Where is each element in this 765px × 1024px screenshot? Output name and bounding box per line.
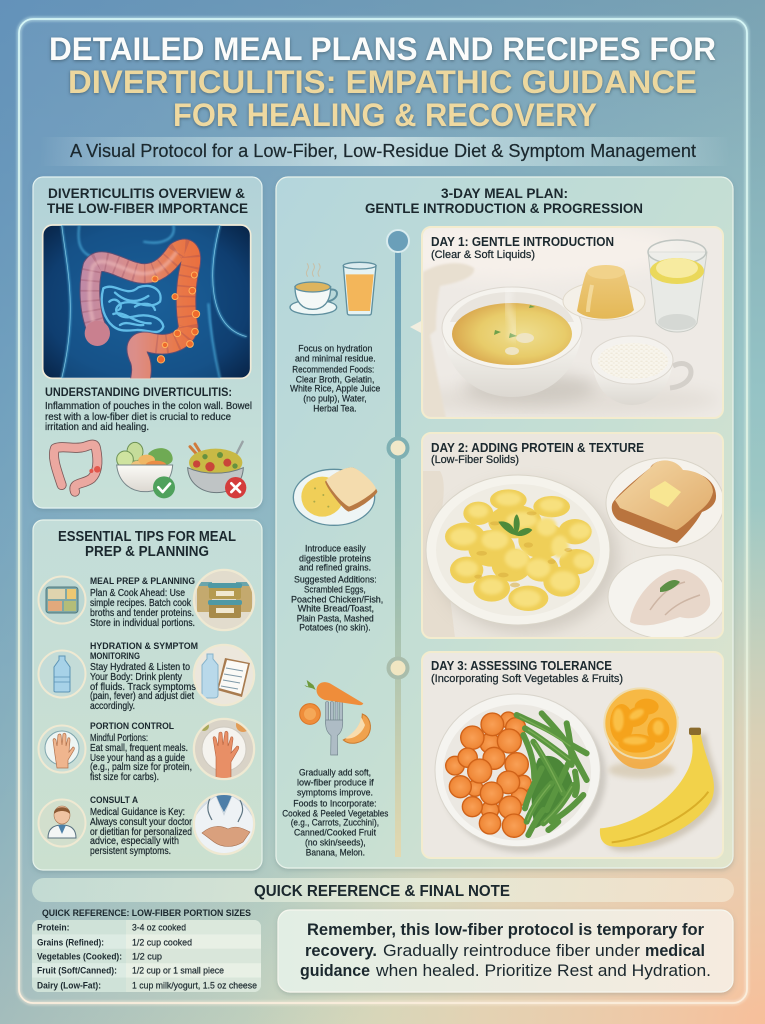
- tips heading: PREP & PLANNING: [85, 544, 209, 560]
- portion size table: [32, 908, 261, 992]
- hydration text: HYDRATION & SYMPTOM: [90, 641, 198, 652]
- anatomy illustration: colon: [43, 225, 251, 383]
- day 2 description: Introduce easily: [305, 544, 366, 554]
- final note: Remember, this low-fiber protocol is temporary for: [307, 920, 704, 939]
- title: FOR HEALING & RECOVERY: [173, 97, 597, 133]
- understanding diverticulitis text: Inflammation of pouches in the colon wall. Bowel: [45, 401, 252, 412]
- meal prep text: [90, 576, 195, 629]
- day 2 description: Poached Chicken/Fish,: [291, 594, 383, 606]
- day 1 description: and minimal residue.: [295, 354, 376, 364]
- title: [49, 31, 716, 133]
- title: DIVERTICULITIS: EMPATHIC GUIDANCE: [68, 64, 697, 100]
- portion control text: Use your hand as a guide: [90, 753, 185, 764]
- tip: portion control: [38, 718, 254, 783]
- day 1 description: [290, 344, 380, 414]
- subtitle: A Visual Protocol for a Low-Fiber, Low-Residue Diet & Symptom Management: [70, 141, 696, 161]
- final note: guidance: [300, 961, 370, 980]
- meal prep text: broths and tender proteins.: [90, 608, 194, 619]
- understanding diverticulitis text: irritation and aid healing.: [45, 422, 149, 433]
- photo: rice cup: [591, 336, 691, 405]
- photo: banana: [600, 728, 719, 851]
- timeline node: day 1: [387, 230, 409, 252]
- portion control text: Eat small, frequent meals.: [90, 743, 188, 754]
- timeline node: day 2: [388, 438, 408, 458]
- photo: toast plate: [606, 458, 724, 548]
- day 2 description: Scrambled Eggs,: [304, 584, 366, 596]
- understanding diverticulitis text: UNDERSTANDING DIVERTICULITIS:: [45, 387, 232, 399]
- tip: hydration: [38, 641, 254, 712]
- table rows: [32, 920, 261, 992]
- day 3 description: Cooked & Peeled Vegetables: [282, 808, 389, 820]
- hydration text: [90, 641, 198, 712]
- day 2 description: Potatoes (no skin).: [299, 622, 371, 634]
- meal plan heading: 3-DAY MEAL PLAN:: [441, 185, 568, 201]
- icon: eggs and toast: [293, 467, 377, 525]
- timeline: [387, 230, 423, 857]
- meal prep text: MEAL PREP & PLANNING: [90, 576, 195, 587]
- photo: napkin: [423, 471, 455, 638]
- tip: consult: [38, 794, 254, 857]
- photo: gelatin: [563, 265, 645, 320]
- table title: QUICK REFERENCE: LOW-FIBER PORTION SIZES: [42, 908, 251, 919]
- day 3 description: low-fiber produce if: [297, 778, 374, 788]
- tips heading: ESSENTIAL TIPS FOR MEAL: [58, 529, 236, 545]
- portion control text: fist size for carbs).: [90, 772, 159, 783]
- tips heading: [58, 529, 236, 560]
- arrow pointer to day 1: [410, 320, 423, 334]
- consult text: Always consult your doctor: [90, 817, 193, 828]
- photo: canned peaches: [604, 688, 678, 778]
- table rows: Grains (Refined):: [37, 938, 104, 948]
- day 1 title: DAY 1: GENTLE INTRODUCTION: [431, 234, 614, 249]
- overview heading: [47, 185, 248, 216]
- final note: medical: [645, 941, 705, 960]
- understanding diverticulitis text: [45, 387, 252, 433]
- day 3 description: Banana, Melon.: [306, 848, 365, 858]
- table rows: 3-4 oz cooked: [132, 922, 186, 934]
- final note: Gradually reintroduce fiber under: [383, 941, 640, 960]
- day 3 description: Canned/Cooked Fruit: [294, 828, 376, 838]
- day 2 title: [431, 440, 644, 466]
- hydration text: accordingly.: [90, 701, 135, 712]
- overview heading: DIVERTICULITIS OVERVIEW &: [48, 185, 245, 201]
- photo: carrots and green beans bowl: [435, 694, 606, 853]
- consult text: Medical Guidance is Key:: [90, 807, 185, 818]
- day 3 description: Foods to Incorporate:: [293, 798, 377, 810]
- portion control text: Mindful Portions:: [90, 733, 148, 744]
- hydration text: Stay Hydrated & Listen to: [90, 662, 190, 673]
- tip: meal prep: [38, 570, 254, 630]
- day 2 description: Plain Pasta, Mashed: [297, 614, 374, 624]
- icon: doctor: [38, 800, 86, 846]
- table rows: Protein:: [37, 922, 70, 932]
- photo: doctor handshake: [194, 794, 254, 854]
- icon: carrot, fork and peach: [300, 680, 370, 755]
- subtitle: [40, 137, 730, 166]
- day 1 title: (Clear & Soft Liquids): [431, 249, 535, 261]
- day 2 description: [291, 544, 383, 634]
- meal prep text: simple recipes. Batch cook: [90, 598, 192, 609]
- icon: tea and juice: [290, 262, 376, 315]
- icon: meal prep box: [38, 576, 86, 624]
- table rows: 1 cup milk/yogurt, 1.5 oz cheese: [132, 980, 257, 992]
- day 3 title: [431, 658, 623, 685]
- title: DETAILED MEAL PLANS AND RECIPES FOR: [49, 31, 716, 67]
- card: day 3: [422, 652, 723, 858]
- day 1 description: Herbal Tea.: [313, 404, 357, 414]
- day 2 title: DAY 2: ADDING PROTEIN & TEXTURE: [431, 440, 644, 455]
- day 2 title: (Low-Fiber Solids): [431, 454, 519, 466]
- portion control text: [90, 721, 192, 783]
- photo: scrambled eggs plate: [426, 475, 618, 633]
- day 2 description: and refined grains.: [299, 562, 371, 574]
- icon: hand on plate: [38, 726, 86, 772]
- meal plan heading: [365, 185, 643, 216]
- day 3 description: (e.g., Carrots, Zucchini),: [291, 818, 379, 828]
- overview heading: THE LOW-FIBER IMPORTANCE: [47, 200, 248, 216]
- day 1 description: Focus on hydration: [298, 344, 372, 354]
- table rows: Dairy (Low-Fat):: [37, 980, 101, 990]
- day 2 description: Suggested Additions:: [294, 574, 377, 586]
- day 3 title: (Incorporating Soft Vegetables & Fruits): [431, 673, 623, 685]
- meal prep text: Store in individual portions.: [90, 618, 195, 629]
- consult text: or dietitian for personalized: [90, 827, 192, 838]
- meal plan heading: GENTLE INTRODUCTION & PROGRESSION: [365, 200, 643, 216]
- final note: recovery.: [305, 941, 377, 960]
- consult text: persistent symptoms.: [90, 846, 171, 857]
- photo: stacked containers: [194, 570, 254, 630]
- table rows: Fruit (Soft/Canned):: [37, 966, 117, 976]
- timeline node: day 3: [388, 658, 408, 678]
- quick reference heading: QUICK REFERENCE & FINAL NOTE: [254, 883, 510, 900]
- photo: soup bowl: [442, 287, 596, 404]
- icon: colon: [54, 445, 101, 492]
- day 3 description: [282, 768, 389, 858]
- portion control text: (e.g., palm size for protein,: [90, 762, 192, 773]
- day 3 description: Gradually add soft,: [299, 768, 371, 778]
- portion control text: PORTION CONTROL: [90, 721, 174, 732]
- day 2 description: digestible proteins: [299, 554, 371, 564]
- day 1 description: Recommended Foods:: [292, 364, 374, 376]
- table rows: 1/2 cup: [132, 952, 162, 962]
- final note: when healed. Prioritize Rest and Hydration.: [375, 961, 711, 980]
- understanding diverticulitis text: rest with a low-fiber diet is crucial to reduce: [45, 412, 231, 423]
- consult text: advice, especially with: [90, 836, 179, 847]
- day 3 title: DAY 3: ASSESSING TOLERANCE: [431, 658, 612, 673]
- panel: diverticulitis overview: [33, 177, 262, 508]
- quick reference heading: [32, 878, 734, 902]
- day 2 description: White Bread/Toast,: [298, 604, 374, 614]
- hydration text: (pain, fever) and adjust diet: [90, 691, 194, 702]
- icon: approved bowl with check: [117, 442, 175, 498]
- photo: bottle and clipboard: [194, 645, 254, 705]
- consult text: [90, 795, 193, 857]
- meal prep text: Plan & Cook Ahead: Use: [90, 588, 185, 599]
- table rows: 1/2 cup cooked: [132, 938, 192, 948]
- table rows: Vegetables (Cooked):: [37, 952, 122, 962]
- day 1 description: (no pulp), Water,: [303, 394, 367, 404]
- small intestine: [102, 286, 163, 332]
- icon: water bottle: [38, 650, 86, 698]
- photo: napkin: [423, 263, 474, 418]
- card: day 1: [421, 226, 724, 419]
- table rows: 1/2 cup or 1 small piece: [132, 966, 224, 976]
- panel: 3-day meal plan: [276, 177, 733, 868]
- photo: hand on plate: [194, 718, 254, 780]
- day 3 description: symptoms improve.: [297, 788, 373, 798]
- day 3 description: (no skin/seeds),: [305, 838, 366, 848]
- photo: chicken plate: [608, 555, 726, 639]
- day 1 title: [431, 234, 614, 261]
- hydration text: of fluids. Track symptoms: [90, 682, 196, 693]
- card: day 2: [422, 433, 726, 639]
- final note: [278, 910, 733, 992]
- photo: water glass with lemon: [648, 240, 707, 332]
- panel: essential tips: [33, 520, 262, 870]
- day 1 description: Clear Broth, Gelatin,: [296, 374, 374, 386]
- hydration text: MONITORING: [90, 651, 140, 662]
- icon: avoid bowl with cross: [188, 442, 246, 498]
- day 1 description: White Rice, Apple Juice: [290, 384, 380, 394]
- hydration text: Your Body: Drink plenty: [90, 672, 182, 683]
- consult text: CONSULT A: [90, 795, 138, 806]
